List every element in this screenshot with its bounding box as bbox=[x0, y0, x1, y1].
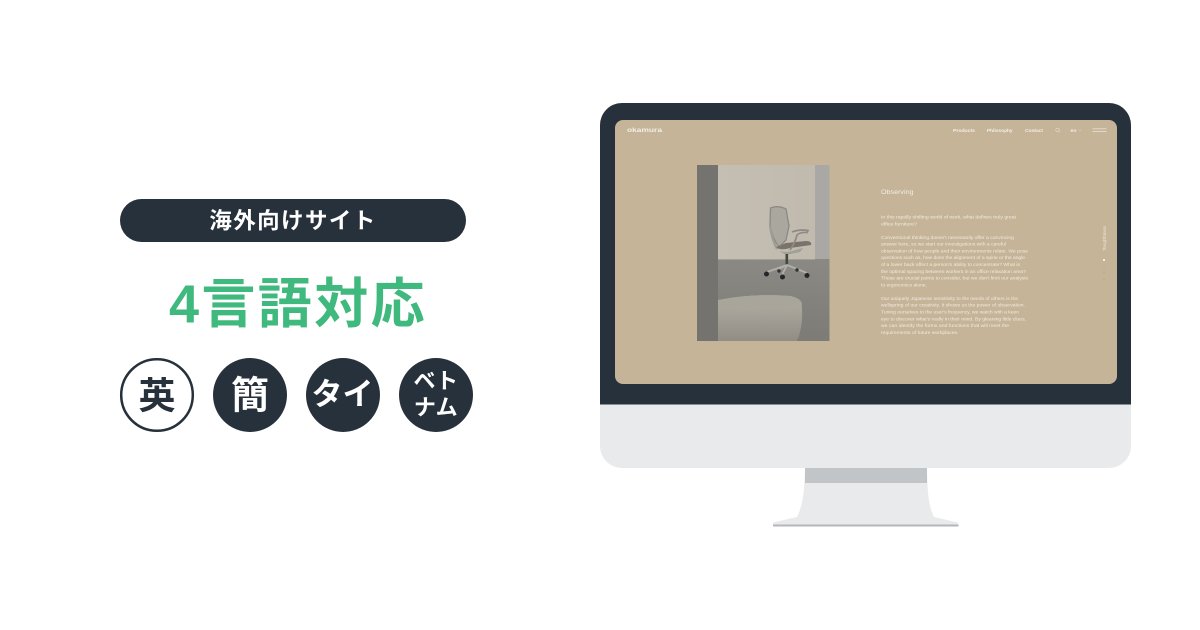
stone stool bbox=[718, 295, 802, 341]
site body copy: to ergonomics alone. bbox=[881, 282, 927, 287]
site body copy: office furniture? bbox=[881, 221, 917, 226]
site body copy: questions such as, how does the alignment of a spine or the angle bbox=[881, 255, 1025, 260]
monitor chin bbox=[600, 404, 1131, 468]
monitor bezel bbox=[600, 103, 1131, 404]
badge: Vietnamese: ナム bbox=[414, 395, 458, 420]
site body copy: Our uniquely Japanese sensitivity to the needs of others is the bbox=[881, 296, 1018, 301]
site body copy: observation of how people and their environments relate. We pose bbox=[881, 248, 1028, 253]
title: 4 languages supported: 4言語対応 bbox=[169, 274, 427, 334]
pill heading: 海外向けサイト bbox=[209, 208, 377, 234]
website screen bbox=[615, 120, 1117, 384]
site logo: okamura bbox=[627, 127, 662, 134]
site navigation: en bbox=[1070, 128, 1077, 133]
side pagination bbox=[1102, 226, 1107, 280]
side pagination: Thoughtfulness bbox=[1102, 226, 1107, 251]
site body copy bbox=[881, 214, 1029, 335]
site navigation: Philosophy bbox=[987, 128, 1013, 133]
site body copy: we can identify the forms and functions that will meet the bbox=[881, 323, 1009, 328]
site body copy: Tuning ourselves to the user's frequency, we watch with a keen bbox=[881, 310, 1019, 314]
site body copy: In this rapidly shifting world of work, what defines truly great bbox=[881, 214, 1017, 220]
office chair bbox=[764, 207, 811, 280]
foreground pillar bbox=[697, 165, 718, 341]
site navigation: Contact bbox=[1025, 128, 1043, 133]
site body copy: eye to discover what's really in their mind. By gleaning little clues, bbox=[881, 316, 1026, 321]
site body copy: the optimal spacing between workers in an office relaxation area? bbox=[881, 269, 1026, 274]
monitor stand bbox=[773, 468, 958, 526]
site body copy: answer here, so we start our investigations with a careful bbox=[881, 242, 1006, 247]
site heading: Observing bbox=[881, 189, 914, 196]
language badges bbox=[121, 358, 473, 432]
badge: Thai bbox=[306, 358, 380, 432]
site body copy: requirements of future workplaces. bbox=[881, 330, 958, 335]
badge: Thai: タイ bbox=[312, 377, 374, 412]
badge: Simplified Chinese: 簡 bbox=[231, 376, 269, 418]
monitor bbox=[600, 103, 1131, 526]
site navigation: Products bbox=[953, 128, 975, 133]
site body copy: of a lower back affect a person's ability to concentrate? What is bbox=[881, 262, 1021, 267]
badge: English bbox=[121, 359, 193, 431]
site body copy: wellspring of our creativity. It shows us the power of observation. bbox=[881, 303, 1025, 308]
site body copy: Conventional thinking doesn't necessarily offer a convincing bbox=[881, 235, 1014, 240]
badge: Simplified Chinese bbox=[213, 358, 287, 432]
site navigation bbox=[953, 128, 1106, 133]
badge: Vietnamese: ベト bbox=[413, 368, 459, 394]
pill heading bbox=[120, 199, 466, 242]
site body copy: These are crucial points to consider, but we don't limit our analysis bbox=[881, 276, 1029, 281]
badge: Vietnamese bbox=[399, 358, 473, 432]
badge: English: 英 bbox=[138, 376, 176, 416]
photo: office chair bbox=[697, 165, 830, 341]
